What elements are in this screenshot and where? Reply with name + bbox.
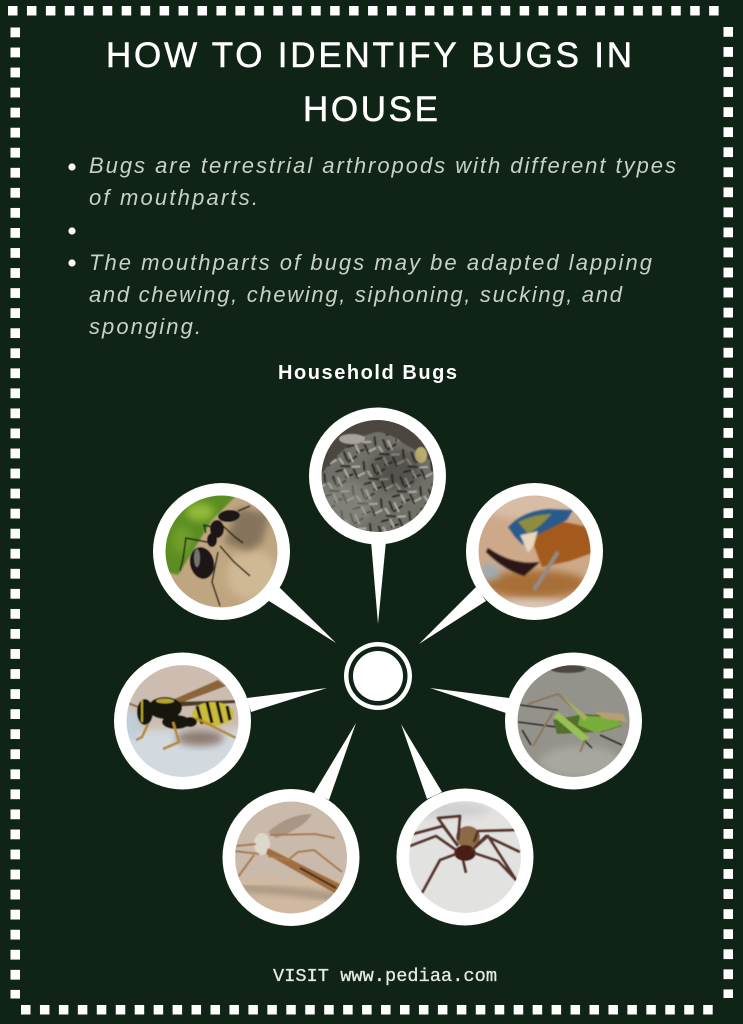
callout: beetle <box>419 483 603 644</box>
title: HOUSE <box>303 90 438 129</box>
callout: grasshopper <box>430 652 642 790</box>
hub diagram <box>114 408 642 926</box>
callout: ant <box>153 483 336 643</box>
bullet 2: sponging. <box>89 314 201 339</box>
callout: spider <box>396 724 534 926</box>
bullet 2: The mouthparts of bugs may be adapted lapping <box>89 250 653 275</box>
callout: crane fly <box>222 723 360 926</box>
bullet 2: and chewing, chewing, siphoning, sucking, and <box>89 282 623 307</box>
bullet 1: of mouthparts. <box>89 185 258 210</box>
centre hub <box>344 642 412 710</box>
subheading: Household Bugs <box>278 362 457 384</box>
bullet 1: Bugs are terrestrial arthropods with different types <box>89 153 676 178</box>
footer link: VISIT www.pediaa.com <box>273 966 497 987</box>
bullet 1 <box>68 153 676 210</box>
title: HOW TO IDENTIFY BUGS IN <box>106 36 632 75</box>
title <box>106 36 632 129</box>
empty bullet <box>68 227 76 235</box>
bullet 2 <box>68 250 653 339</box>
callout: wasp <box>114 652 327 790</box>
callout: termites <box>309 408 446 624</box>
bullet list <box>68 153 676 339</box>
